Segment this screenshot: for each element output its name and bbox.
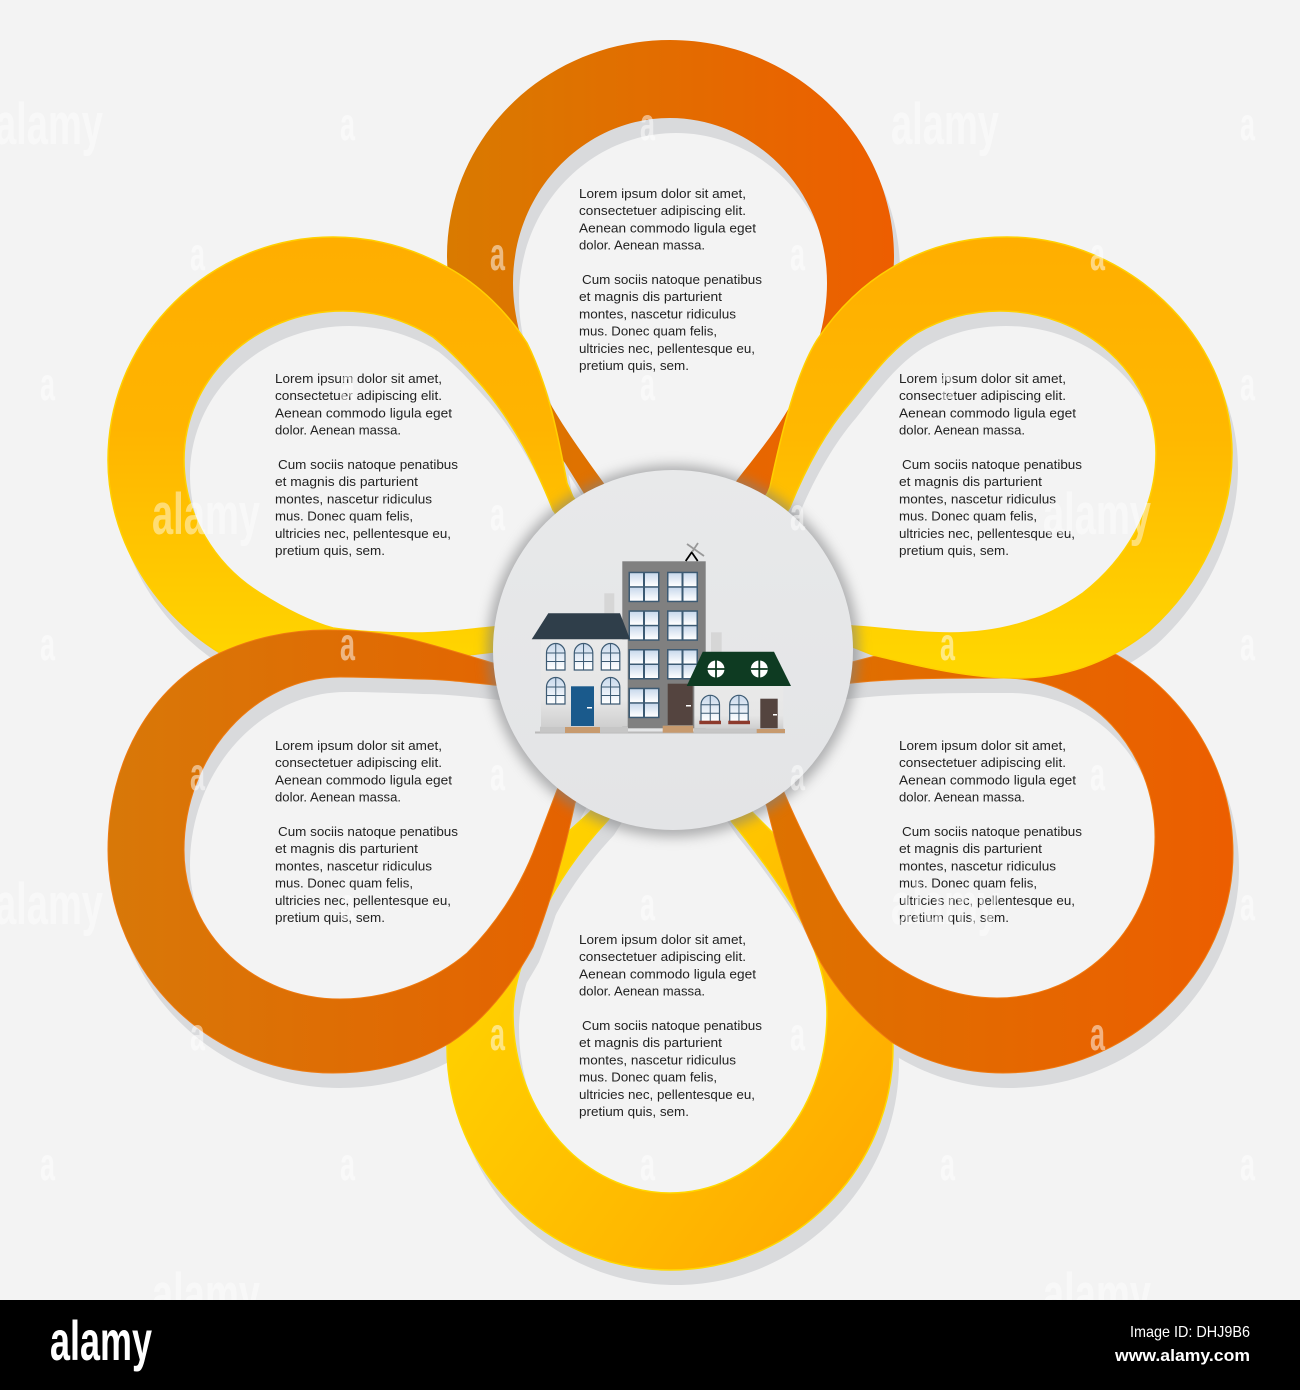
watermark: a — [40, 1138, 55, 1190]
petal: top orange — [447, 40, 894, 520]
text block: top petal: consectetuer adipiscing elit. — [579, 203, 746, 218]
text block: upper right petal — [899, 371, 1083, 558]
text block: lower right petal: mus. Donec quam felis, — [899, 876, 1037, 891]
text block: lower right petal: dolor. Aenean massa. — [899, 790, 1025, 805]
footer logo: alamy — [50, 1309, 152, 1372]
text block: upper left petal: montes, nascetur ridiculus — [275, 491, 433, 506]
text block: bottom petal: montes, nascetur ridiculus — [579, 1052, 737, 1067]
antenna — [686, 543, 704, 561]
text block: lower left petal — [275, 738, 459, 925]
watermark: a — [1090, 228, 1105, 280]
watermark: a — [1090, 748, 1105, 800]
text block: upper right petal: montes, nascetur ridiculus — [899, 491, 1057, 506]
text block: top petal: Cum sociis natoque penatibus — [582, 272, 763, 287]
watermark: a — [640, 358, 655, 410]
text block: upper left petal — [275, 371, 459, 558]
text block: upper right petal: Aenean commodo ligula eget — [899, 405, 1076, 420]
watermark: a — [1240, 98, 1255, 150]
text block: upper left petal: et magnis dis parturient — [275, 474, 418, 489]
petal: upper left yellow — [108, 237, 590, 668]
footer bar — [0, 1300, 1300, 1390]
text block: upper right petal: Lorem ipsum dolor sit amet, — [899, 371, 1066, 386]
watermark: a — [340, 1138, 355, 1190]
watermark: a — [1240, 618, 1255, 670]
text block: top petal: et magnis dis parturient — [579, 289, 722, 304]
petal: upper right yellow — [755, 237, 1232, 678]
text block: upper left petal: pretium quis, sem. — [275, 543, 385, 558]
footer image id: Image ID: DHJ9B6 — [1130, 1324, 1250, 1341]
text block: upper left petal: Cum sociis natoque penatibus — [278, 457, 459, 472]
text block: top petal: pretium quis, sem. — [579, 358, 689, 373]
watermark: a — [340, 358, 355, 410]
watermark: a — [640, 1138, 655, 1190]
text block: top petal — [579, 186, 763, 373]
text block: lower left petal: Lorem ipsum dolor sit amet, — [275, 738, 442, 753]
text block: bottom petal — [579, 932, 763, 1119]
footer url: www.alamy.com — [1114, 1346, 1250, 1365]
text block: upper left petal: Lorem ipsum dolor sit amet, — [275, 371, 442, 386]
text block: upper right petal: ultricies nec, pellentesque eu, — [899, 526, 1075, 541]
text block: bottom petal: consectetuer adipiscing elit. — [579, 949, 746, 964]
text block: bottom petal: Aenean commodo ligula eget — [579, 966, 756, 981]
text block: upper left petal: mus. Donec quam felis, — [275, 509, 413, 524]
chimney left — [604, 593, 614, 613]
text block: lower right petal: consectetuer adipiscing elit. — [899, 755, 1066, 770]
watermark: a — [640, 878, 655, 930]
center circle — [493, 470, 853, 830]
text block: lower left petal: et magnis dis parturient — [275, 841, 418, 856]
watermark: a — [1090, 1008, 1105, 1060]
watermark: a — [790, 228, 805, 280]
watermark: alamy — [891, 872, 999, 937]
watermark: alamy — [152, 1262, 260, 1327]
text block: lower left petal: Aenean commodo ligula eget — [275, 772, 452, 787]
right house — [687, 652, 791, 733]
text block: bottom petal: Cum sociis natoque penatibus — [582, 1018, 763, 1033]
text block: lower left petal: pretium quis, sem. — [275, 910, 385, 925]
watermark: a — [190, 1008, 205, 1060]
watermark: alamy — [1043, 482, 1151, 547]
text block: bottom petal: mus. Donec quam felis, — [579, 1070, 717, 1085]
watermark: alamy — [152, 482, 260, 547]
watermark: a — [190, 228, 205, 280]
text block: upper right petal: pretium quis, sem. — [899, 543, 1009, 558]
watermark: a — [340, 98, 355, 150]
petal shadows — [114, 55, 1239, 1285]
text block: upper right petal: et magnis dis parturient — [899, 474, 1042, 489]
text block: top petal: dolor. Aenean massa. — [579, 238, 705, 253]
tower block — [622, 561, 706, 728]
watermark: a — [40, 358, 55, 410]
watermark: a — [1240, 878, 1255, 930]
text block: bottom petal: ultricies nec, pellentesque eu, — [579, 1087, 755, 1102]
text block: lower left petal: ultricies nec, pellentesque eu, — [275, 893, 451, 908]
petal: bottom yellow — [447, 780, 893, 1270]
watermark: a — [490, 748, 505, 800]
chimney right — [711, 632, 722, 652]
watermark: a — [790, 1008, 805, 1060]
watermark: alamy — [891, 92, 999, 157]
text block: lower right petal: Cum sociis natoque penatibus — [902, 824, 1083, 839]
text block: upper left petal: consectetuer adipiscing elit. — [275, 388, 442, 403]
text block: lower left petal: Cum sociis natoque penatibus — [278, 824, 459, 839]
watermark: a — [190, 748, 205, 800]
text block: lower right petal: et magnis dis parturient — [899, 841, 1042, 856]
text block: top petal: Aenean commodo ligula eget — [579, 220, 756, 235]
watermark: a — [790, 488, 805, 540]
text block: lower right petal: Lorem ipsum dolor sit amet, — [899, 738, 1066, 753]
ground line — [535, 732, 785, 734]
text block: top petal: Lorem ipsum dolor sit amet, — [579, 186, 746, 201]
watermark: a — [940, 1138, 955, 1190]
watermark: a — [40, 618, 55, 670]
watermark: a — [940, 358, 955, 410]
text block: lower right petal: ultricies nec, pellentesque eu, — [899, 893, 1075, 908]
center circle shadow — [487, 465, 859, 837]
watermark: a — [790, 748, 805, 800]
text block: upper left petal: ultricies nec, pellentesque eu, — [275, 526, 451, 541]
text block: upper right petal: dolor. Aenean massa. — [899, 423, 1025, 438]
text block: upper right petal: Cum sociis natoque penatibus — [902, 457, 1083, 472]
watermark: a — [340, 878, 355, 930]
text block: bottom petal: dolor. Aenean massa. — [579, 984, 705, 999]
petal: lower left orange — [108, 630, 590, 1073]
text block: top petal: montes, nascetur ridiculus — [579, 306, 737, 321]
text block: upper right petal: consectetuer adipiscing elit. — [899, 388, 1066, 403]
front steps — [663, 726, 693, 733]
watermark: alamy — [1043, 1262, 1151, 1327]
text block: lower right petal: montes, nascetur ridiculus — [899, 858, 1057, 873]
text block: upper left petal: Aenean commodo ligula eget — [275, 405, 452, 420]
text block: upper left petal: dolor. Aenean massa. — [275, 423, 401, 438]
petal: lower right orange — [755, 643, 1233, 1073]
watermark: a — [640, 98, 655, 150]
text block: lower left petal: mus. Donec quam felis, — [275, 876, 413, 891]
text block: lower right petal: Aenean commodo ligula eget — [899, 772, 1076, 787]
text block: lower left petal: montes, nascetur ridiculus — [275, 858, 433, 873]
watermark: a — [490, 228, 505, 280]
watermark: a — [1240, 1138, 1255, 1190]
text block: bottom petal: Lorem ipsum dolor sit amet, — [579, 932, 746, 947]
text block: lower right petal: pretium quis, sem. — [899, 910, 1009, 925]
text block: bottom petal: et magnis dis parturient — [579, 1035, 722, 1050]
text block: lower left petal: dolor. Aenean massa. — [275, 790, 401, 805]
text block: bottom petal: pretium quis, sem. — [579, 1104, 689, 1119]
watermark: a — [340, 618, 355, 670]
text block: top petal: mus. Donec quam felis, — [579, 324, 717, 339]
text block: lower right petal — [899, 738, 1083, 925]
left house — [532, 613, 630, 733]
watermark: a — [490, 488, 505, 540]
watermark: a — [1240, 358, 1255, 410]
icon: houses illustration — [532, 543, 791, 734]
watermark: a — [490, 1008, 505, 1060]
watermark: a — [940, 618, 955, 670]
text block: top petal: ultricies nec, pellentesque eu, — [579, 341, 755, 356]
text block: lower left petal: consectetuer adipiscing elit. — [275, 755, 442, 770]
text block: upper right petal: mus. Donec quam felis, — [899, 509, 1037, 524]
